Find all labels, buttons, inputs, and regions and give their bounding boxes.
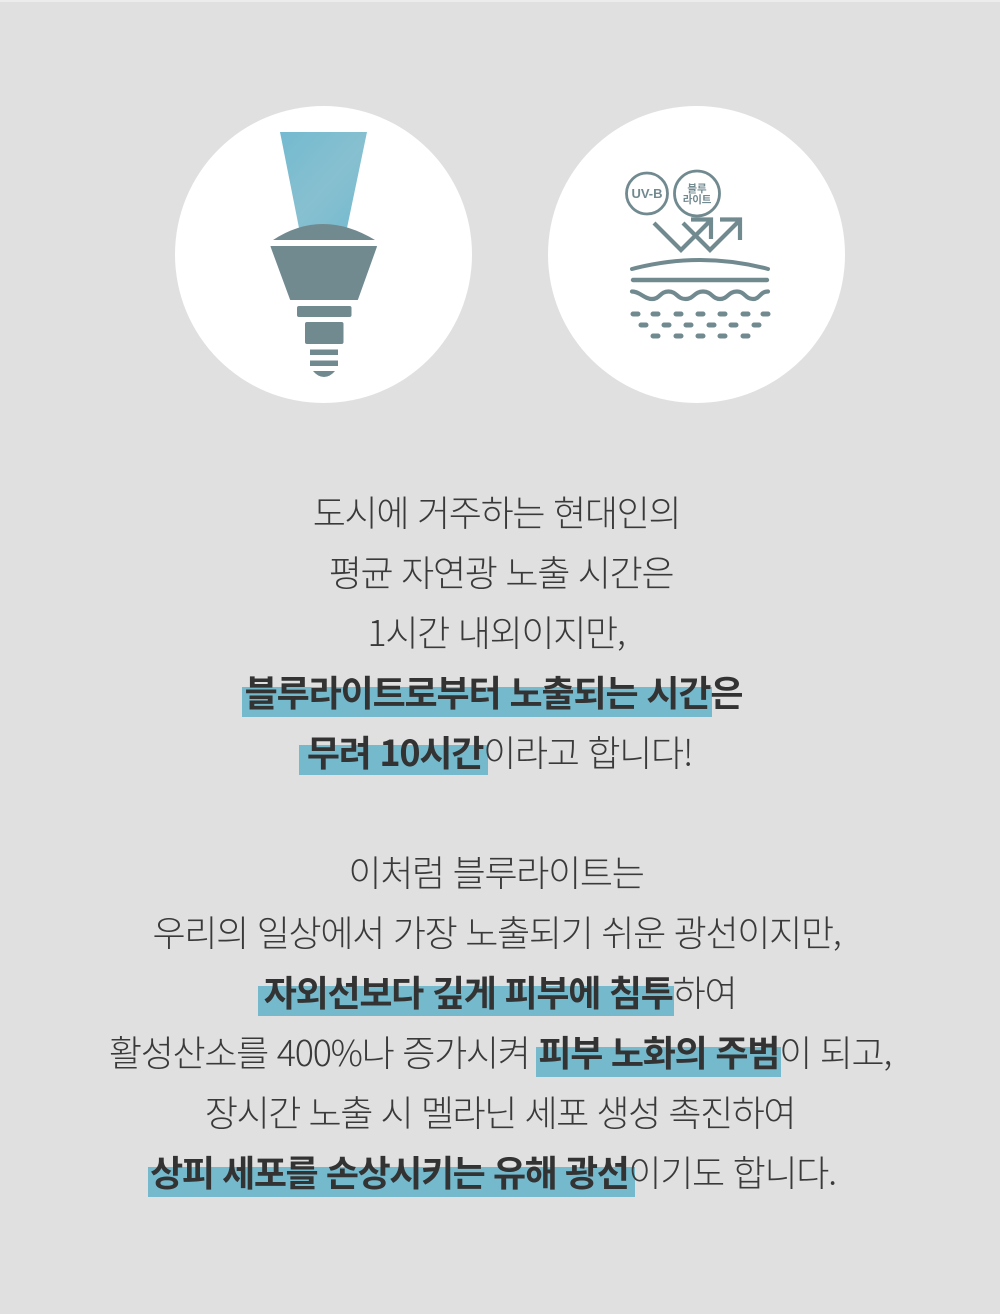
line 10: 장시간 노출 시 멜라닌 세포 생성 촉진하여 — [205, 1085, 795, 1137]
line 9: 활성산소를 400%나 증가시켜 피부 노화의 주범이 되고, — [109, 1025, 891, 1077]
icon: skin penetration circle: 라이트 — [683, 192, 712, 207]
highlight bar 5 — [148, 1167, 635, 1197]
text block: exposure time — [242, 485, 742, 777]
line 3: 1시간 내외이지만, — [367, 605, 625, 657]
text block: harm of blue light — [109, 845, 891, 1197]
icon: skin penetration circle — [548, 106, 845, 403]
line 11: 상피 세포를 손상시키는 유해 광선이기도 합니다. — [150, 1145, 836, 1197]
highlight bar 4 — [536, 1047, 781, 1077]
line 1: 도시에 거주하는 현대인의 — [313, 485, 680, 537]
line 8: 자외선보다 깊게 피부에 침투하여 — [264, 965, 736, 1017]
highlight bar 2 — [299, 745, 488, 775]
top edge highlight — [0, 0, 1000, 2]
line 2: 평균 자연광 노출 시간은 — [329, 545, 673, 597]
line 5: 무려 10시간이라고 합니다! — [307, 725, 692, 777]
line 6: 이처럼 블루라이트는 — [348, 845, 644, 897]
icon: LED bulb circle — [175, 106, 472, 403]
line 4: 블루라이트로부터 노출되는 시간은 — [245, 665, 742, 717]
icon: skin penetration circle: 블루 — [687, 181, 707, 196]
highlight bar 3 — [258, 986, 674, 1016]
highlight bar 1 — [242, 687, 712, 717]
icon: skin penetration circle: UV-B — [631, 186, 663, 201]
line 7: 우리의 일상에서 가장 노출되기 쉬운 광선이지만, — [152, 905, 841, 957]
